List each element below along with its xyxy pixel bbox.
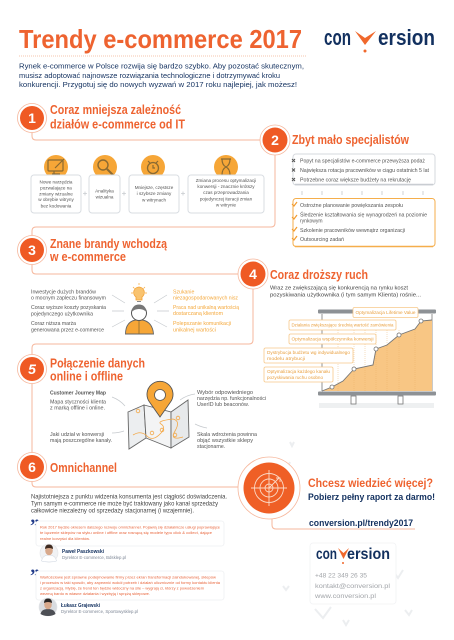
contact card [310, 543, 396, 604]
chart label: lifetime value [353, 308, 418, 318]
section 1 number: 1 [28, 110, 36, 126]
contact card: www.conversion.pl [314, 593, 377, 600]
arrows: around person [112, 295, 169, 327]
icon: magnifier [93, 155, 117, 179]
section 4 heading: Coraz droższy ruch [270, 267, 368, 282]
quote 1 author [62, 549, 126, 560]
panel: solutions: Ostrożne planowanie powiększania zespołu [300, 203, 403, 209]
text: map notes [197, 390, 266, 450]
text: brand challenges: pojedynczego użytkownika [31, 312, 93, 318]
icon: quote mark 2: ” [30, 566, 40, 587]
panel: problems: Największa rotacja pracowników w ciągu ostatnich 5 lat [300, 168, 430, 174]
text: brand solutions: Praca nad unikalną wartością [173, 305, 239, 311]
section 5 heading: online i offline [50, 370, 123, 384]
contact card: kontakt@conversion.pl [315, 583, 391, 590]
chart label: conversion rate [289, 334, 376, 344]
text: map notes: UserID lub beaconów. [197, 402, 249, 408]
text: customer journey: z marką offline i online. [50, 406, 105, 412]
text: customer journey: Customer Journey Map [50, 390, 106, 396]
section 3 heading: Znane brandy wchodzą [50, 237, 168, 251]
icon row: tools [44, 155, 238, 179]
panel: solutions: Outsourcing zadań [300, 237, 344, 243]
section 4 number [238, 259, 268, 289]
panel: problems: Popyt na specjalistów e-commerce przewyższa podaż [300, 158, 426, 164]
logo: conversion small: con [316, 546, 337, 563]
text: map notes: stacjonarne. [197, 444, 225, 450]
process box: optimisation: czas przeprowadzania [203, 190, 249, 195]
report link: conversion.pl/trendy2017 [309, 518, 413, 529]
intro text: konkurencji. Przygotuj się do nowych wyzwań w 2017 roku najlepiej, jak możesz! [19, 80, 297, 89]
chart label: order value [289, 320, 396, 330]
panel: solutions: Śledzenie kształtowania się wynagrodzeń na poziomie [300, 210, 427, 218]
text: brand challenges: Coraz wyższe koszty pozyskania [31, 305, 106, 311]
chart label: conversion rate: Optymalizacja współczynnika konwersji [292, 336, 374, 342]
section 1 heading [50, 103, 185, 132]
quote 1 author: Paweł Paszkowski [62, 549, 105, 555]
process box: visual analytics: wizualna [96, 194, 114, 200]
quote 2: i procesów w taki sposób, aby zapewnić wokół potrzeb i działań ulicznicznie od formy kontaktu klienta [40, 581, 221, 585]
quote 2: Wartościowe jest sprawne podejmowanie firmy przez ekran transformacji zaindukowanej, sklepów [40, 576, 216, 580]
process box: new tools: Nowe narzędzia [40, 180, 73, 184]
icon: light bulb [131, 283, 147, 302]
text: brand solutions [173, 290, 239, 334]
process box: visual analytics [89, 175, 120, 213]
section 6 number: 6 [28, 459, 36, 475]
section 1 heading: Coraz mniejsza zależność [50, 103, 181, 117]
intro text: musisz adoptować najnowsze rozwiązania technologiczne i dotrzymywać kroku [19, 71, 280, 80]
quote 2 [36, 571, 224, 600]
panel: solutions: rynkowym [300, 218, 323, 224]
section 6 text [31, 494, 227, 514]
decorative background marks [282, 442, 412, 625]
text: brand solutions: niezagospodarowanych nisz [173, 296, 238, 302]
chart label: channel optimisation: pozyskiwania ruchu osobno [267, 375, 324, 380]
section 6 heading: Omnichannel [50, 461, 117, 475]
intro text: Rynek e-commerce w Polsce rozwija się bardzo szybko. Aby pozostać skutecznym, [19, 62, 304, 70]
call to action: Pobierz pełny raport za darmo! [308, 492, 435, 503]
icon: location pin [147, 381, 173, 417]
icon: stopwatch [141, 155, 165, 179]
panel: solutions: Szkolenie pracowników wewnątrz organizacji [300, 228, 405, 234]
portrait: Paweł Paszkowski [40, 544, 58, 562]
chart: rising traffic cost [318, 310, 436, 408]
quote 1: te łączenie sklepów na styku online i offline oraz rosnącą się modele typu click & collect, dające [40, 531, 212, 535]
text: map notes: Wybór odpowiedniego [197, 390, 253, 396]
text: customer journey: Mapa styczności klienta [50, 400, 106, 406]
text: customer journey [50, 390, 112, 444]
icon: hourglass [214, 155, 238, 179]
text: brand challenges: Coraz niższa marża [31, 321, 76, 327]
quote 2 author: Łukasz Grajewski [61, 603, 101, 609]
process box: new tools: zmiany wizualne [39, 192, 73, 196]
section 5 heading [50, 356, 145, 384]
text: brand solutions: Polepszanie komunikacji [173, 321, 231, 327]
process box: new tools [31, 175, 81, 213]
section 3 number [18, 236, 46, 264]
process box: smaller changes: i szybsze zmiany [137, 191, 172, 196]
text: brand solutions: Szukanie [173, 290, 194, 296]
chart label: budget distribution: modelu atrybucji [267, 356, 305, 361]
text: map notes: narzędzia np. funkcjonalności [197, 396, 266, 402]
quote 1 author: Dyrektor E-commerce, Bdsklep.pl [62, 555, 126, 560]
process box: optimisation [188, 175, 264, 213]
section 6 text: Tym samym e-commerce nie może być traktowany jako kanał sprzedaży [31, 500, 219, 508]
arrows: around map [112, 394, 207, 433]
text: brand challenges [31, 290, 106, 334]
arrows: problems to solutions [302, 191, 423, 195]
section 5 number: 5 [28, 361, 36, 377]
section 5 number [18, 354, 46, 384]
icon: radar target [238, 457, 300, 519]
process box: visual analytics: Analityka [95, 188, 114, 194]
text: brand solutions: unikalnej wartości [173, 328, 216, 334]
text: customer journey: mają poszczególne kanały. [50, 438, 112, 444]
panel: problems: Potrzebne coraz większe budżety na rekrutację [300, 178, 411, 184]
process box: new tools: w obrębie witryny [38, 197, 74, 202]
icon: monitor and pencil [44, 155, 68, 179]
icon: person [126, 304, 154, 334]
quote 1: realne korzyści dla klientów. [40, 537, 90, 541]
panel: solutions [292, 198, 435, 246]
section 4 number: 4 [249, 266, 257, 282]
process box: new tools: pozwalające na [40, 186, 72, 190]
section 6 text: Najistotniejsza z punktu widzenia konsumenta jest ciągłość doświadczenia. [31, 494, 227, 500]
section 2 heading: Zbyt mało specjalistów [292, 132, 410, 147]
section 3 heading [49, 237, 168, 264]
quote 1 [36, 521, 224, 546]
section 6 number [18, 452, 46, 482]
process box: new tools: bez kodowania [41, 204, 72, 208]
section 3 heading: w e-commerce [49, 250, 126, 264]
process box: smaller changes: w witrynach [142, 198, 166, 202]
text: map notes: objąć wszystkie sklepy [197, 438, 253, 444]
chart label: lifetime value: Optymalizacja Lifetime Value [356, 310, 416, 315]
quote 2 author [61, 603, 138, 614]
section 4 text: Wraz ze zwiększającą się konkurencją na rynku koszt [270, 286, 408, 292]
chart label: budget distribution [264, 348, 353, 363]
text: brand challenges: Inwestycje dużych brandów [31, 290, 96, 296]
intro text [19, 62, 304, 89]
logo: conversion small: ersion [347, 546, 390, 563]
text: brand challenges: generowana przez e-commerce [31, 328, 104, 334]
process box: optimisation: pojedynczej iteracji zmian [200, 196, 253, 202]
text: brand challenges: o mocnym zapleczu finansowym [31, 296, 106, 302]
chart label: order value: Działania zwiększające średnią wartość zamówienia [292, 322, 394, 328]
section 2 number [260, 125, 290, 155]
quote 1: Rok 2017 będzie okresem dalszego rozwoju omnichannel. Pojawią się działalnicze usługi poprawiające [40, 526, 220, 530]
call to action: Chcesz wiedzieć więcej? [308, 476, 433, 490]
section 4 text [270, 286, 421, 298]
section 1 number [18, 104, 46, 132]
connector lines [32, 130, 415, 529]
icon: quote mark 1: ” [30, 516, 40, 537]
process box: smaller changes: Mniejsze, częstsze [135, 185, 174, 190]
chart label: channel optimisation: Optymalizacja każdego kanału [267, 369, 331, 374]
quote 2 author: Dyrektor E-commerce, Sportowysklep.pl [61, 609, 138, 614]
process box: optimisation: konwersji - znacznie krótszy [197, 184, 255, 189]
quote 2: z organizacją. Myślę, że trend ten będzie widoczny na sile – wygrają ci, którzy z powodzeniem [40, 586, 204, 590]
logo: conversion: ersion [378, 25, 435, 50]
process box: optimisation: Zmiana procesu optymalizacji [196, 178, 256, 183]
logo: conversion small [316, 546, 390, 564]
logo: conversion [324, 25, 435, 52]
section 4 text: pozyskiwania użytkownika (i tym samym Klienta) rośnie... [270, 292, 421, 298]
section 3 number: 3 [28, 242, 36, 258]
process box: smaller changes [129, 175, 179, 213]
section 5 heading: Połączenie danych [50, 356, 145, 370]
call to action [308, 476, 435, 503]
chart label: channel optimisation [264, 367, 333, 382]
chart label: budget distribution: Dystrybucja budżetu wg indywidualnego [267, 350, 351, 355]
logo: conversion: con [324, 25, 351, 50]
text: map notes: Skala wdrożenia powinna [197, 432, 257, 438]
contact card: +48 22 349 26 35 [315, 572, 367, 580]
quote 2: wezmą bardo w własne działania i wyzbyją i sprężą sklepowe. [40, 592, 150, 596]
process box: optimisation: w witrynie [216, 202, 237, 208]
section 1 heading: działów e-commerce od IT [50, 118, 185, 132]
title: Trendy e-commerce 2017 [19, 24, 302, 54]
plus signs [83, 192, 185, 196]
text: brand solutions: dostarczaną klientom [173, 311, 223, 317]
portrait: Łukasz Grajewski [39, 598, 57, 616]
text: customer journey: Jaki udział w konwersji [50, 432, 104, 438]
section 6 text: całkowicie niezależny od sprzedaży stacjonarnej (i wzajemnie). [31, 508, 194, 514]
panel: problems [292, 154, 435, 185]
icon: map with pin [128, 381, 189, 449]
section 2 number: 2 [271, 132, 279, 148]
